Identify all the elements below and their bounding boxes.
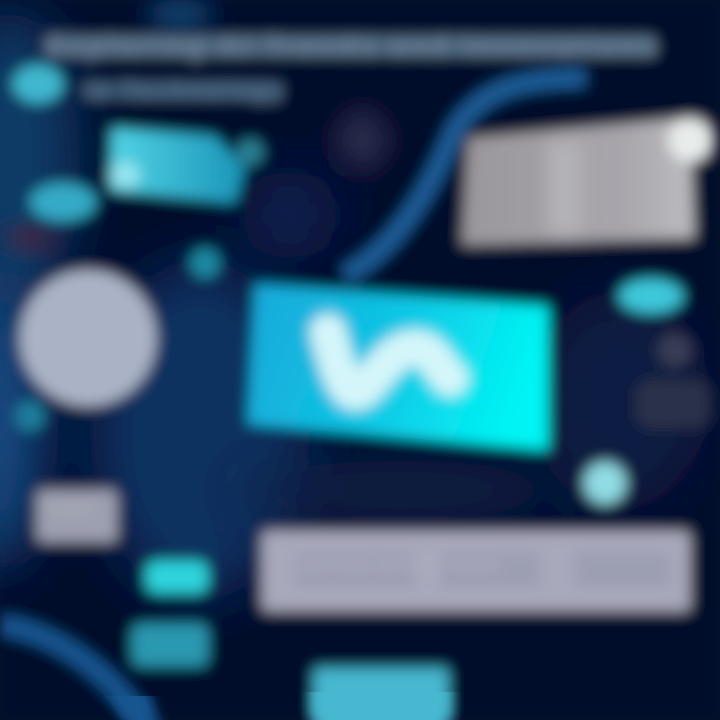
icon: cyan badge right	[619, 279, 683, 313]
title	[46, 31, 656, 103]
bottom teal panel	[314, 668, 448, 720]
decorative arc: upper right	[345, 78, 585, 275]
icon: dark figure top center	[336, 110, 388, 170]
cyan label	[146, 561, 208, 593]
lower left arc edge fill	[112, 696, 158, 720]
icon: top left cyan blob	[13, 65, 63, 103]
central cyan screen	[248, 284, 548, 450]
panel: cyan card	[110, 128, 263, 203]
panel: top right grey	[462, 118, 712, 245]
bottom teal panel edge fill	[314, 692, 448, 720]
decorative arc: lower left	[0, 625, 140, 720]
grey text box left: Insight	[44, 499, 90, 515]
grey text box left	[37, 490, 117, 542]
icon: small teal dot	[190, 248, 220, 278]
icon: cyan blob left	[30, 183, 96, 221]
icon: light cyan circle	[584, 462, 626, 504]
icon: white waveform logo	[328, 332, 450, 392]
icon: dark grey figure right	[636, 333, 710, 428]
title: Exploring AI Trends and Innovations	[46, 31, 656, 61]
icon: small teal dot lower left	[15, 401, 45, 431]
grey circle chart	[20, 270, 156, 406]
panel: bottom wide grey bar	[262, 531, 690, 611]
teal label	[132, 624, 208, 666]
panel: bottom wide grey bar: Key trends and future outlook	[300, 557, 499, 573]
title: in Technology	[84, 78, 283, 103]
